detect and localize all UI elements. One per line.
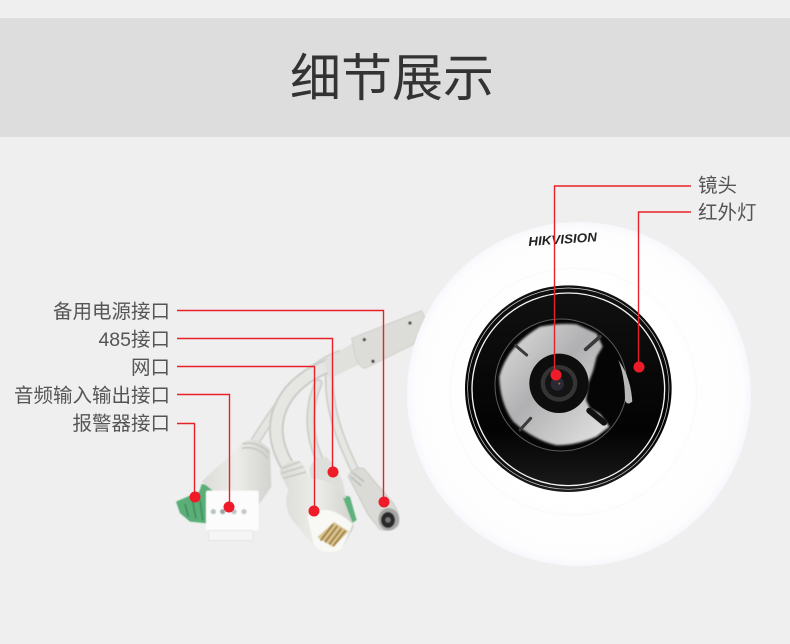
title: 细节展示 [290,50,494,107]
cable with connectors [176,311,429,553]
power connector [348,468,399,531]
camera lens [529,354,589,413]
callout: audio in/out port: 音频输入输出接口 [14,385,170,407]
silver reflective plate [499,324,609,445]
callout: 485 port [98,329,338,478]
network green back block [342,495,357,525]
housing rings [450,268,697,515]
callout: alarm port: 报警器接口 [72,413,170,435]
white terminal block [206,491,259,541]
callout: network port: 网口 [131,357,170,379]
bezel highlight rings [468,288,669,489]
callout: network port [131,357,320,516]
network connector [279,461,354,553]
camera housing [407,222,751,566]
ferrite core [352,311,429,368]
breakout cables [255,355,357,475]
plate slots [516,337,604,430]
header band [0,18,790,137]
alarm connector green block [176,484,213,523]
callout: 485 port: 485接口 [98,329,170,351]
cable junction [323,343,362,378]
callout: alarm port [72,413,200,502]
ferrite dots [363,321,412,363]
lens bezel [465,285,672,492]
callout: lens [550,175,737,380]
callout: lens: 镜头 [698,175,737,197]
brand logo: HIKVISION [528,230,598,249]
inner dome ring [495,319,627,451]
rear connector boot [309,457,346,498]
callout: audio in/out port [14,385,234,512]
callout: backup power port: 备用电源接口 [53,301,170,323]
callout: backup power port [53,301,390,508]
audio boot [202,440,271,503]
camera [407,222,751,566]
callout: infrared light [634,202,757,372]
side reflection [618,360,632,403]
callout: infrared light: 红外灯 [698,202,757,224]
